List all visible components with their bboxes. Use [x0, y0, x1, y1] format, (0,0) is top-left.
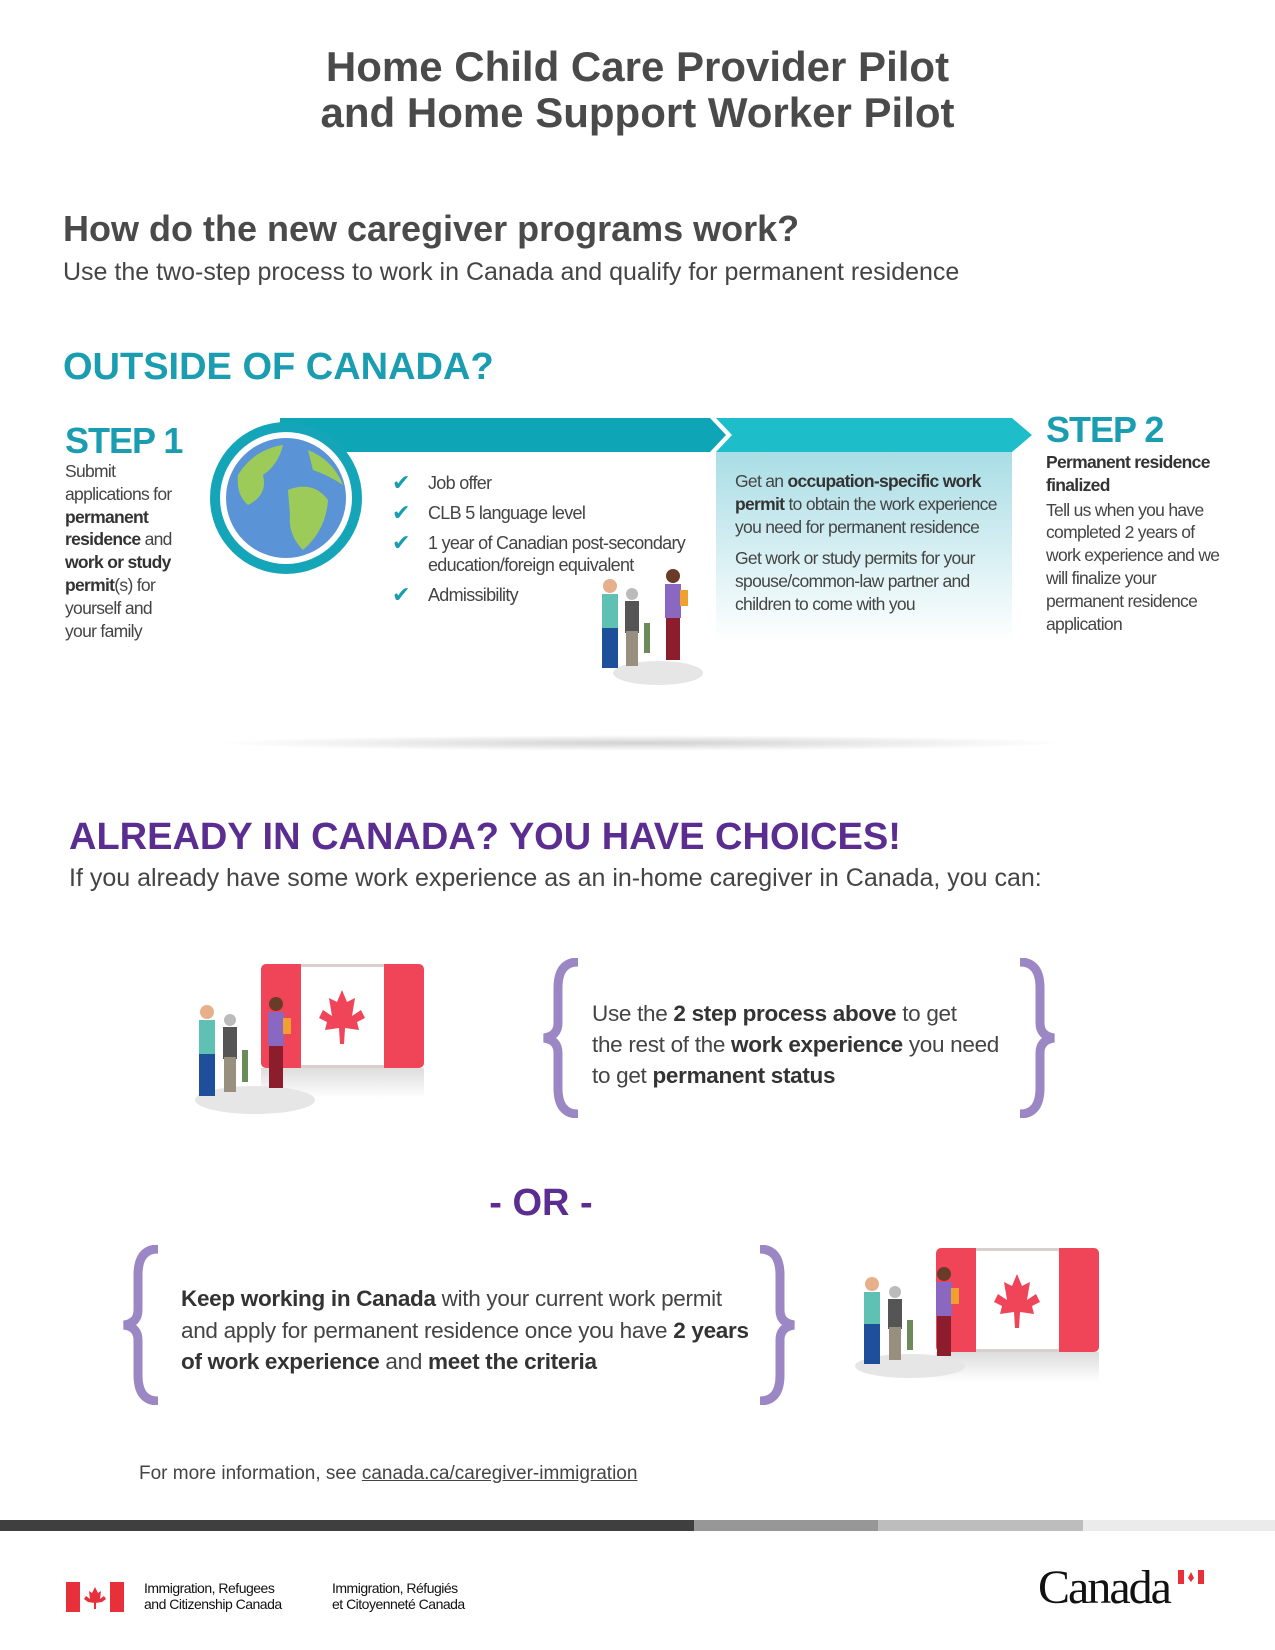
footer: government signature: and Citizenship Canada [144, 1596, 282, 1612]
footer: government signature: Immigration, Refugees [144, 1580, 274, 1596]
step 2: STEP 2 [1046, 409, 1163, 450]
checklist: 1 year of Canadian post-secondary education/foreign equivalent [428, 533, 685, 575]
checklist: ✔ [392, 470, 410, 495]
flag with people 2 [855, 1248, 1099, 1378]
subtext: If you already have some work experience as an in-home caregiver in Canada, you can: [69, 864, 1042, 892]
step 2: Tell us when you have completed 2 years of work experience and we will finalize your permanent residence application [1046, 500, 1219, 634]
option 2 callout: and apply for permanent residence once you have 2 years [181, 1318, 749, 1342]
heading: outside of canada: OUTSIDE OF CANADA? [63, 346, 494, 388]
checklist: ✔ [392, 582, 410, 607]
option 1 callout: the rest of the work experience you need [592, 1032, 999, 1057]
footer: government signature [66, 1580, 466, 1612]
people group 1 [602, 569, 703, 685]
option 1 callout: Use the 2 step process above to get [592, 1001, 957, 1026]
or divider: - OR - [489, 1182, 593, 1224]
checklist: ✔ [392, 530, 410, 555]
checklist [392, 470, 686, 607]
option 2 callout [123, 1245, 795, 1405]
checklist: Job offer [428, 473, 491, 493]
heading: already in canada: ALREADY IN CANADA? YOU HAVE CHOICES! [69, 816, 901, 858]
footer: government signature: Immigration, Réfugiés [332, 1580, 458, 1596]
icon: globe [210, 422, 362, 574]
step 1: Submit applications for permanent residence and work or study permit(s) for yourself and your family [65, 461, 172, 641]
title: and Home Support Worker Pilot [321, 89, 954, 136]
more info link: For more information, see canada.ca/caregiver-immigration [139, 1463, 637, 1484]
checklist: Admissibility [428, 585, 518, 605]
checklist: ✔ [392, 500, 410, 525]
option 1 callout: to get permanent status [592, 1063, 835, 1088]
step 2 panel text [735, 471, 997, 614]
title: Home Child Care Provider Pilot [326, 43, 949, 90]
flag with people 1 [195, 964, 424, 1114]
step 2 [1046, 409, 1220, 634]
footer bar [0, 1520, 1275, 1531]
option 2 callout: Keep working in Canada with your current work permit [181, 1286, 722, 1311]
heading: how do programs work: How do the new caregiver programs work? [63, 208, 799, 249]
step 1: STEP 1 [65, 420, 182, 461]
checklist: CLB 5 language level [428, 503, 585, 523]
step 2 panel text: Get an occupation-specific work permit to obtain the work experience you need for permanent residence [735, 471, 997, 537]
arrow band [280, 418, 1032, 624]
option 2 callout: of work experience and meet the criteria [181, 1349, 597, 1374]
option 1 callout [543, 958, 1055, 1118]
canada wordmark: Canada [1038, 1561, 1170, 1614]
footer: government signature: et Citoyenneté Canada [332, 1596, 465, 1612]
step 2: Permanent residence finalized [1046, 452, 1210, 495]
step 2 panel text: Get work or study permits for your spouse/common-law partner and children to come with you [735, 548, 975, 614]
title [321, 43, 954, 136]
shadow [210, 735, 1073, 751]
subtitle: Use the two-step process to work in Canada and qualify for permanent residence [63, 258, 959, 286]
